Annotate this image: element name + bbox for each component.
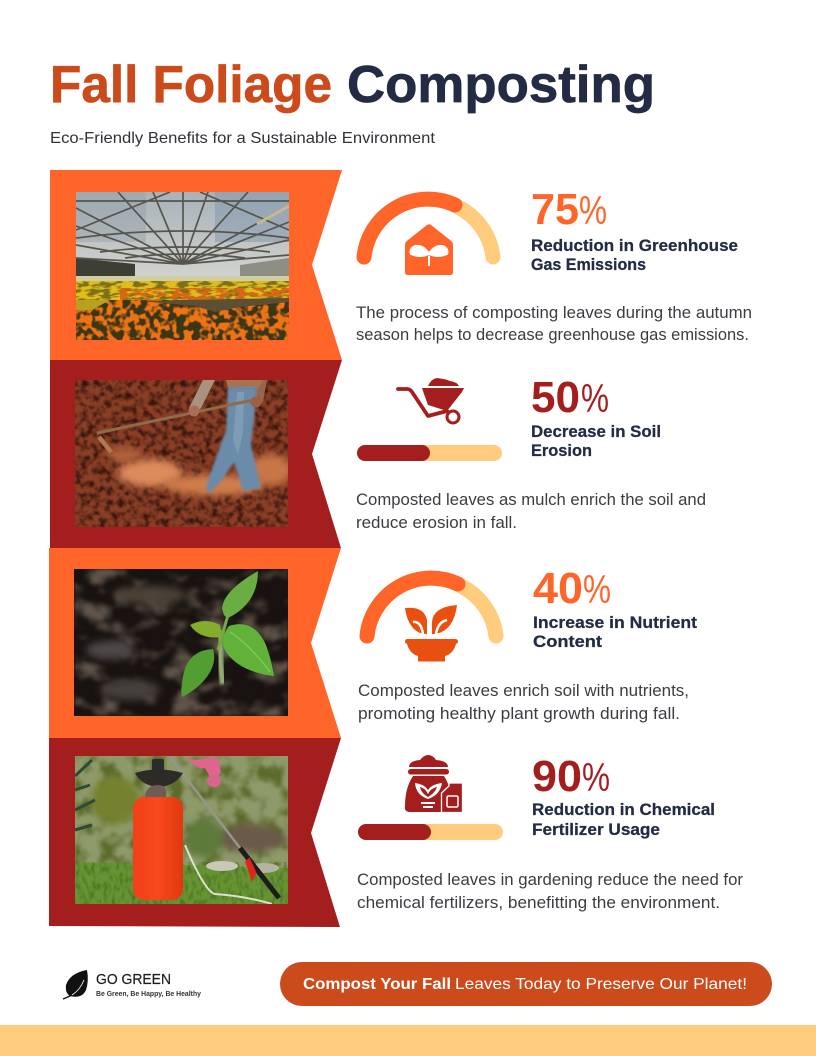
call to action pill: Leaves Today to Preserve Our Planet! xyxy=(455,976,747,993)
stat heading: Erosion xyxy=(531,442,592,460)
subtitle: Eco-Friendly Benefits for a Sustainable Environment xyxy=(50,130,436,147)
description xyxy=(357,871,744,912)
stat 2: soil erosion xyxy=(356,373,706,532)
icon: plant in bowl xyxy=(405,605,458,662)
icon: leaf xyxy=(63,970,88,999)
description xyxy=(356,491,706,532)
stat number 75: % xyxy=(579,189,607,233)
description: The process of composting leaves during the autumn xyxy=(356,304,752,322)
stat heading: Decrease in Soil xyxy=(531,423,661,441)
stat heading xyxy=(532,801,715,839)
photo: greenhouse xyxy=(76,192,289,340)
description xyxy=(356,304,752,344)
progress bar xyxy=(357,445,502,461)
stat heading xyxy=(531,423,661,460)
logo: Go Green xyxy=(63,970,201,999)
stat heading: Content xyxy=(533,633,603,651)
title: Composting xyxy=(347,56,655,114)
icon: fertilizer sack and jug xyxy=(405,755,462,812)
progress bar xyxy=(358,824,503,840)
logo: Go Green: Be Green, Be Happy, Be Healthy xyxy=(96,991,201,998)
description: Composted leaves as mulch enrich the soil and xyxy=(356,491,706,509)
stat heading: Increase in Nutrient xyxy=(533,614,698,632)
gauge: 75 percent xyxy=(364,199,493,257)
title xyxy=(50,56,655,114)
description: Composted leaves in gardening reduce the need for xyxy=(357,871,744,889)
icon: wheelbarrow xyxy=(398,378,464,423)
bottom colour band xyxy=(0,1025,816,1056)
description: chemical fertilizers, benefitting the environment. xyxy=(357,894,720,912)
logo: Go Green: GO GREEN xyxy=(96,971,171,988)
stat heading: Reduction in Greenhouse xyxy=(531,237,738,255)
stat number 50: 50 xyxy=(531,373,580,422)
stat number 90 xyxy=(532,752,610,801)
icon: greenhouse sprout xyxy=(405,224,453,275)
panel: banner greenhouse xyxy=(50,170,342,360)
stat heading: Fertilizer Usage xyxy=(532,821,660,839)
panel: banner soil xyxy=(50,360,342,548)
stat number 50: % xyxy=(581,377,609,421)
panel: banner sprayer xyxy=(49,738,341,927)
description xyxy=(358,682,689,723)
stat 4: chemical fertilizer xyxy=(357,752,744,912)
photo: garden sprayer xyxy=(75,756,288,904)
description: reduce erosion in fall. xyxy=(356,514,517,532)
stat number 40: 40 xyxy=(533,564,583,613)
description: promoting healthy plant growth during fall. xyxy=(358,705,680,723)
stat number 40: % xyxy=(583,568,611,612)
stat number 90: 90 xyxy=(532,752,582,801)
stat heading xyxy=(533,614,698,651)
gauge: 40 percent xyxy=(367,578,496,636)
call to action pill xyxy=(280,962,772,1006)
call to action pill: Compost Your Fall xyxy=(303,976,451,993)
description: season helps to decrease greenhouse gas emissions. xyxy=(356,326,749,344)
stat number 75 xyxy=(531,185,607,234)
stat heading xyxy=(531,237,738,274)
title: Fall Foliage xyxy=(50,56,332,114)
photo: soil hoeing xyxy=(75,380,292,527)
stat number 40 xyxy=(533,564,611,613)
description: Composted leaves enrich soil with nutrients, xyxy=(358,682,689,700)
photo: seedling xyxy=(74,569,288,716)
stat number 50 xyxy=(531,373,609,422)
panel: banner seedling xyxy=(49,548,341,738)
stat number 90: % xyxy=(582,756,610,800)
stat heading: Reduction in Chemical xyxy=(532,801,715,819)
stat 3: nutrient content xyxy=(358,564,698,723)
stat heading: Gas Emissions xyxy=(531,256,646,274)
stat number 75: 75 xyxy=(531,185,579,234)
stat 1: greenhouse gas xyxy=(356,185,752,344)
